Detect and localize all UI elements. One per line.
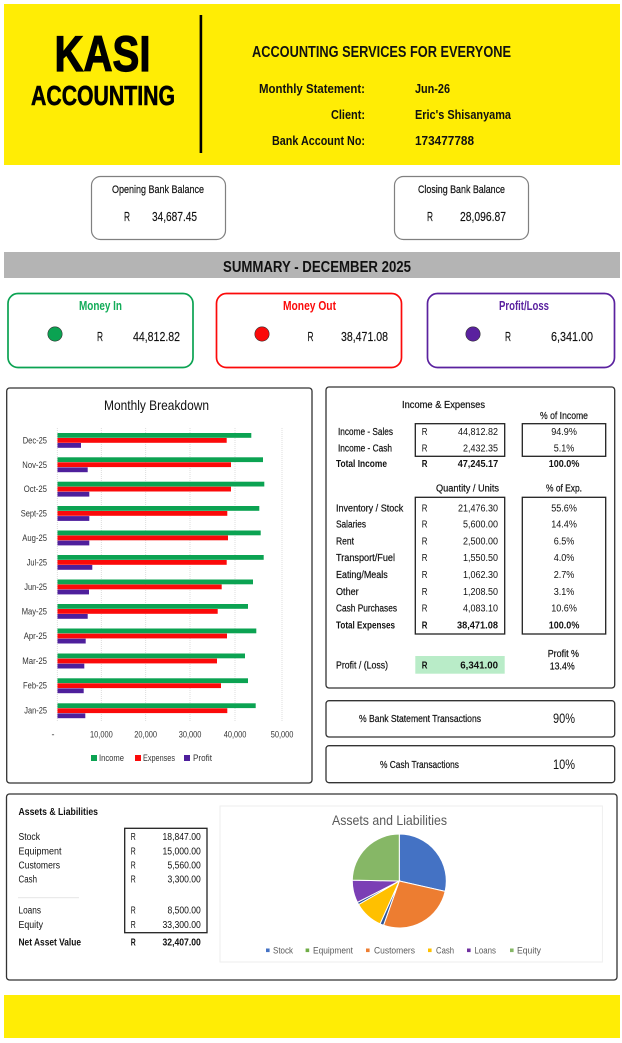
- bar chart: Oct-25: [24, 484, 47, 494]
- assets table: Loans: [18, 906, 41, 917]
- income rows: 2,432.35: [463, 443, 498, 454]
- chart x axis labels: 40,000: [224, 730, 246, 740]
- pie legend: Loans: [474, 945, 496, 955]
- expense rows: 5,600.00: [463, 520, 498, 531]
- assets table: Equipment: [18, 846, 62, 858]
- assets table: 3,300.00: [168, 875, 201, 886]
- pie legend: Equity: [517, 945, 541, 955]
- expense rows: R: [422, 536, 427, 547]
- panel: monthly breakdown chart: [7, 388, 312, 783]
- pie legend: Stock: [273, 945, 293, 955]
- income rows: 94.9%: [551, 427, 577, 438]
- panel: cash transactions: 10%: [553, 756, 575, 772]
- expense rows: 38,471.08: [457, 620, 498, 631]
- card: money out: [216, 294, 402, 368]
- assets table: [18, 828, 207, 949]
- assets table: 5,560.00: [168, 861, 201, 872]
- expense rows: Inventory / Stock: [336, 503, 404, 514]
- card: money in: 44,812.82: [133, 330, 180, 344]
- expense rows: R: [422, 604, 427, 615]
- income rows: Income - Sales: [338, 427, 393, 438]
- assets table: Equity: [18, 920, 43, 931]
- assets table: R: [131, 875, 136, 886]
- expense rows: R: [422, 620, 428, 631]
- assets table: R: [131, 906, 136, 917]
- chart title: Monthly Breakdown: [104, 397, 209, 413]
- income rows: 5.1%: [554, 443, 574, 454]
- statement details: [259, 81, 512, 148]
- statement details: 173477788: [415, 133, 474, 148]
- statement details: Monthly Statement:: [259, 81, 365, 96]
- profit row: 13.4%: [550, 662, 575, 673]
- icon: green dot: [48, 327, 62, 341]
- expense rows: R: [422, 570, 427, 581]
- chart x axis labels: 30,000: [179, 730, 201, 740]
- card: money out: Money Out: [283, 299, 337, 313]
- bar chart: May-25: [22, 606, 47, 616]
- chart legend: Profit: [193, 753, 212, 763]
- profit row: Profit %: [548, 649, 579, 660]
- panel: cash transactions: [326, 746, 615, 783]
- expense rows: 4,083.10: [463, 604, 498, 615]
- card: opening bank balance: 34,687.45: [152, 210, 197, 224]
- panel: income and expenses table: [326, 387, 615, 688]
- expense rows: [336, 484, 606, 634]
- logo: ACCOUNTING: ACCOUNTING: [31, 80, 175, 111]
- assets table: Stock: [18, 832, 41, 843]
- expense rows: 100.0%: [549, 620, 579, 631]
- statement details: Eric's Shisanyama: [415, 107, 512, 122]
- summary heading bar: [4, 252, 620, 278]
- pie legend: Equipment: [313, 945, 353, 955]
- assets table: R: [131, 920, 136, 931]
- card: profit or loss: Profit/Loss: [499, 299, 549, 313]
- income rows: R: [422, 443, 427, 454]
- income rows: R: [422, 427, 427, 438]
- card: opening bank balance: Opening Bank Balance: [112, 184, 204, 196]
- expense rows: 6.5%: [554, 536, 574, 547]
- chart x axis labels: 10,000: [90, 730, 113, 740]
- expense rows: 4.0%: [554, 553, 574, 564]
- card: money in: [8, 294, 193, 368]
- assets table: 8,500.00: [168, 906, 201, 917]
- pie chart: [352, 834, 446, 928]
- card: closing bank balance: [394, 176, 528, 240]
- chart legend: [91, 753, 212, 763]
- expense rows: 14.4%: [551, 520, 577, 531]
- bar chart: Sept-25: [21, 508, 47, 518]
- assets table: Cash: [18, 875, 37, 886]
- assets table: 15,000.00: [162, 846, 201, 858]
- card: opening bank balance: R: [124, 210, 130, 224]
- bar chart: Aug-25: [22, 533, 47, 543]
- panel: bank statement transactions: [326, 701, 615, 737]
- expense rows: R: [422, 553, 427, 564]
- bar chart: Dec-25: [23, 435, 47, 445]
- expense rows: 21,476.30: [458, 503, 498, 514]
- bar chart: Apr-25: [24, 631, 47, 641]
- chart x axis labels: -: [52, 730, 54, 740]
- income rows: [336, 411, 606, 470]
- bar chart: [21, 428, 282, 722]
- income rows: 100.0%: [549, 459, 579, 470]
- bar chart: Mar-25: [22, 656, 47, 666]
- expense rows: Salaries: [336, 520, 366, 531]
- assets table: 33,300.00: [162, 920, 201, 931]
- expense rows: 1,208.50: [463, 587, 498, 598]
- expense rows: 1,062.30: [463, 570, 498, 581]
- summary heading bar: SUMMARY - DECEMBER 2025: [223, 259, 411, 276]
- card: profit or loss: R: [505, 330, 511, 344]
- icon: purple dot: [466, 327, 480, 341]
- income rows: Total Income: [336, 459, 387, 470]
- expense rows: Other: [336, 587, 359, 598]
- card: money in: Money In: [79, 299, 122, 313]
- panel: cash transactions: % Cash Transactions: [380, 760, 459, 771]
- assets table: R: [131, 938, 136, 949]
- assets table: 32,407.00: [162, 938, 201, 949]
- expense rows: R: [422, 503, 427, 514]
- assets table: Net Asset Value: [18, 938, 81, 949]
- pie title: Assets and Liabilities: [332, 812, 447, 828]
- card: closing bank balance: R: [427, 210, 433, 224]
- pie legend: Cash: [436, 945, 454, 955]
- expense rows: % of Exp.: [546, 484, 582, 495]
- profit row: [336, 649, 579, 674]
- bar chart: Jan-25: [24, 706, 47, 716]
- panel: assets and liabilities: [6, 794, 617, 980]
- bar chart: Feb-25: [23, 681, 47, 691]
- card: closing bank balance: Closing Bank Balance: [418, 184, 505, 196]
- pie legend: [266, 945, 541, 955]
- expense rows: R: [422, 520, 427, 531]
- expense rows: Transport/Fuel: [336, 553, 395, 564]
- expense rows: R: [422, 587, 427, 598]
- card: opening bank balance: [92, 176, 226, 240]
- bar chart: Jun-25: [24, 582, 47, 592]
- profit row: R: [422, 660, 428, 671]
- income rows: Income - Cash: [338, 443, 392, 454]
- assets table: 18,847.00: [162, 832, 201, 843]
- bar chart: Nov-25: [22, 460, 47, 470]
- chart legend: Income: [99, 753, 124, 763]
- statement details: Bank Account No:: [272, 133, 365, 148]
- card: profit or loss: 6,341.00: [551, 330, 593, 344]
- income rows: 47,245.17: [458, 459, 499, 470]
- expense rows: 2.7%: [554, 570, 574, 581]
- expense rows: Rent: [336, 536, 354, 547]
- expense rows: 3.1%: [554, 587, 574, 598]
- tagline: ACCOUNTING SERVICES FOR EVERYONE: [252, 44, 511, 61]
- header banner: [4, 4, 620, 165]
- assets table: Customers: [18, 861, 60, 872]
- card: money in: R: [97, 330, 103, 344]
- card: money out: 38,471.08: [341, 330, 388, 344]
- statement details: Jun-26: [415, 81, 450, 96]
- income rows: 44,812.82: [458, 427, 498, 438]
- expense rows: Total Expenses: [336, 620, 395, 631]
- expense rows: Quantity / Units: [436, 484, 499, 495]
- expense rows: Cash Purchases: [336, 604, 397, 615]
- footer banner: [4, 995, 620, 1038]
- panel: bank statement transactions: 90%: [553, 710, 575, 726]
- pie chart card: [220, 806, 602, 962]
- assets heading: Assets & Liabilities: [18, 806, 98, 818]
- chart x axis labels: [52, 730, 293, 740]
- chart legend: Expenses: [143, 753, 175, 763]
- income rows: % of Income: [540, 411, 588, 422]
- icon: red dot: [255, 327, 269, 341]
- card: closing bank balance: 28,096.87: [460, 210, 506, 224]
- expense rows: 2,500.00: [463, 536, 498, 547]
- expense rows: Eating/Meals: [336, 570, 388, 581]
- assets table: R: [131, 861, 136, 872]
- panel: bank statement transactions: % Bank Statement Transactions: [359, 714, 481, 725]
- pie legend: Customers: [374, 945, 415, 955]
- card: money out: R: [308, 330, 314, 344]
- chart x axis labels: 50,000: [271, 730, 293, 740]
- bar chart: Jul-25: [27, 557, 47, 567]
- profit row: 6,341.00: [460, 660, 498, 671]
- chart x axis labels: 20,000: [134, 730, 157, 740]
- logo: KASI: KASI: [54, 26, 150, 82]
- income rows: R: [422, 459, 428, 470]
- table heading: Income & Expenses: [402, 400, 485, 411]
- assets table: R: [131, 846, 136, 858]
- profit row: Profit / (Loss): [336, 660, 388, 671]
- assets table: R: [131, 832, 136, 843]
- card: profit or loss: [428, 294, 614, 368]
- expense rows: 10.6%: [551, 604, 577, 615]
- expense rows: 55.6%: [551, 503, 577, 514]
- expense rows: 1,550.50: [463, 553, 498, 564]
- statement details: Client:: [331, 107, 365, 122]
- header divider: [200, 15, 202, 153]
